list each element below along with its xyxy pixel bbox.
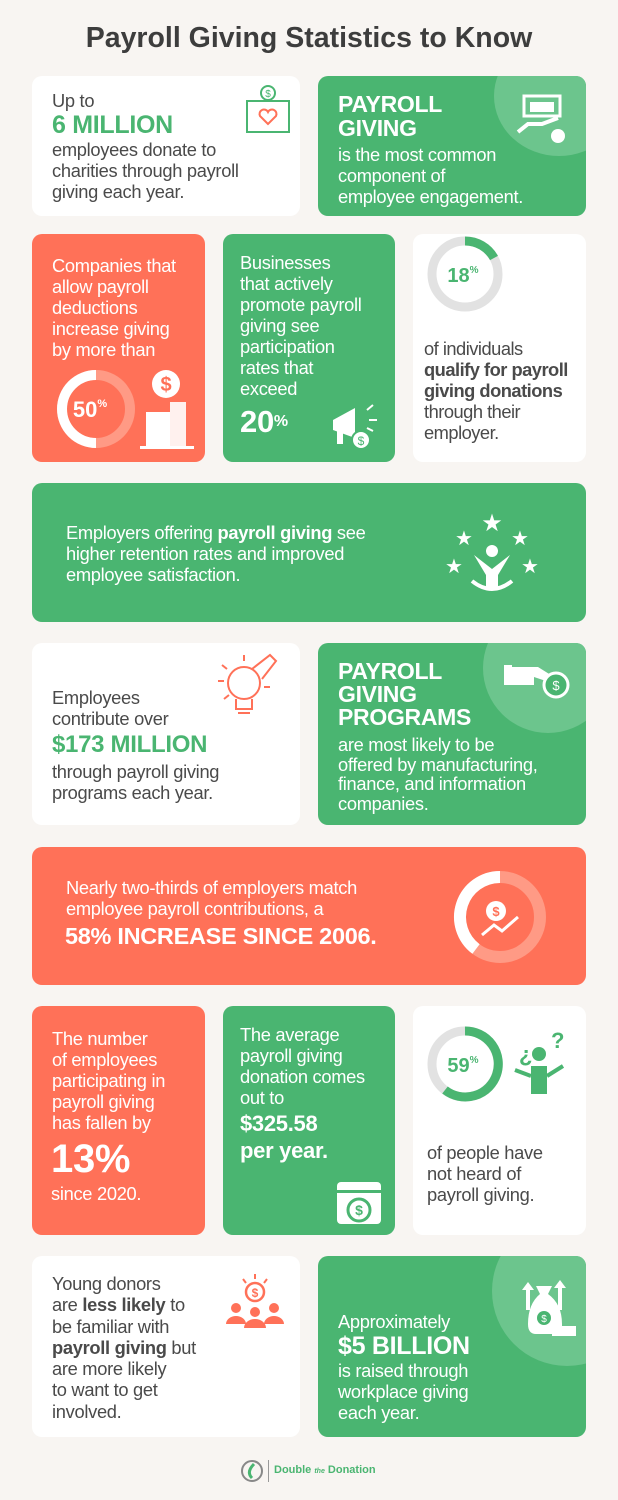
icon: money bag: $ <box>541 1314 547 1325</box>
text <box>338 144 523 207</box>
stat: 58% increase: 58% INCREASE SINCE 2006. <box>65 923 376 949</box>
panel: young donors <box>32 1256 300 1437</box>
text: each year. <box>338 1402 419 1423</box>
icon: donors group <box>226 1274 284 1328</box>
text: increase giving <box>52 318 169 339</box>
text: not heard of <box>427 1163 521 1184</box>
text: higher retention rates and improved <box>66 543 344 564</box>
text: donation comes <box>240 1066 365 1087</box>
text: $5 BILLION <box>338 1332 470 1360</box>
text: deductions <box>52 297 137 318</box>
icon: donors group: $ <box>252 1286 259 1300</box>
icon: calendar <box>337 1182 381 1224</box>
text: out to <box>240 1087 284 1108</box>
stat: 13%: 13% <box>51 1137 130 1181</box>
text: programs each year. <box>52 782 213 803</box>
icon: donation box <box>246 85 290 133</box>
text: qualify for payroll <box>424 359 568 380</box>
logo: Double the Donation: Double the Donation <box>274 1464 376 1476</box>
chart: 59% donut: % <box>470 1055 479 1066</box>
chart: 18% donut <box>428 236 502 312</box>
panel: 20% <box>223 234 395 462</box>
heading: payroll giving: PAYROLL <box>338 91 442 117</box>
text: through payroll giving <box>52 761 219 782</box>
icon: calendar: $ <box>355 1202 363 1218</box>
text <box>338 1311 470 1423</box>
icon: stars person: ★ <box>511 528 529 550</box>
text <box>427 1142 543 1205</box>
logo: Double the Donation <box>241 1460 376 1482</box>
icon: megaphone <box>333 404 377 448</box>
text: 6 million: 6 MILLION <box>52 111 173 139</box>
text: Employees <box>52 687 140 708</box>
text: Businesses <box>240 252 330 273</box>
panel: 6 million <box>32 76 300 216</box>
text <box>52 1028 165 1133</box>
text: of individuals <box>424 338 523 359</box>
text: $173 MILLION <box>52 731 207 758</box>
text <box>52 255 176 360</box>
banner: retention <box>32 483 586 622</box>
text: to want to get <box>52 1379 158 1400</box>
stat: 20%: 20% <box>240 404 288 439</box>
icon: confused person <box>514 1030 564 1094</box>
panel: 59% <box>413 1006 586 1235</box>
text: since 2020. <box>51 1183 141 1204</box>
text: giving donations <box>424 380 562 401</box>
text <box>424 338 568 443</box>
text: The number <box>52 1028 148 1049</box>
heading: payroll giving: GIVING <box>338 115 417 141</box>
panel: 18% <box>413 234 586 462</box>
text: payroll giving. <box>427 1184 534 1205</box>
text: Employers offering payroll giving see <box>66 522 365 543</box>
text: be familiar with <box>52 1316 169 1337</box>
text: that actively <box>240 273 333 294</box>
chart: donut with growth icon: $ <box>492 904 500 919</box>
icon: money bag <box>522 1280 576 1336</box>
stat: per year. <box>240 1138 328 1163</box>
title: Payroll Giving Statistics to Know <box>86 22 532 54</box>
stat: $325.58 <box>240 1111 317 1136</box>
panel: 50% <box>32 234 205 462</box>
text: workplace giving <box>338 1381 468 1402</box>
text: is raised through <box>338 1360 468 1381</box>
icon: stars person: ★ <box>481 510 503 537</box>
text: are less likely to <box>52 1294 185 1315</box>
chart: 18% donut: 18 <box>447 265 470 287</box>
icon: building: $ <box>160 374 172 396</box>
icon: hand coin <box>504 665 570 698</box>
chart: 50% donut <box>57 370 135 448</box>
chart: 18% donut: % <box>470 265 479 276</box>
text: of people have <box>427 1142 543 1163</box>
panel: programs <box>318 643 586 825</box>
text: are more likely <box>52 1358 166 1379</box>
text: 6 million: Up to <box>52 90 94 111</box>
text: 6 million: charities through payroll <box>52 160 239 181</box>
text: offered by manufacturing, <box>338 754 537 774</box>
icon: lightbulb <box>218 654 278 714</box>
text: employee payroll contributions, a <box>66 898 323 919</box>
text <box>66 877 357 919</box>
text: exceed <box>240 378 297 399</box>
text: The average <box>240 1024 339 1045</box>
icon: hand coin: $ <box>552 678 560 693</box>
text <box>338 734 537 814</box>
panel: 13% <box>32 1006 205 1235</box>
chart: 59% donut: 59 <box>447 1055 470 1077</box>
text: payroll giving <box>240 1045 342 1066</box>
text: employer. <box>424 422 499 443</box>
text: are most likely to be <box>338 734 494 755</box>
icon: stars person <box>445 510 539 591</box>
stat <box>240 1111 328 1163</box>
text: is the most common <box>338 144 496 165</box>
text: contribute over <box>52 708 168 729</box>
text: participating in <box>52 1070 165 1091</box>
panel: most common component <box>318 76 586 216</box>
icon: donation box: $ <box>265 89 271 100</box>
icon: money hand <box>516 94 565 143</box>
text: Approximately <box>338 1311 450 1332</box>
text: has fallen by <box>52 1112 151 1133</box>
icon: building <box>140 370 194 449</box>
panel: $5 billion <box>318 1256 586 1437</box>
text: payroll giving <box>52 1091 154 1112</box>
text: by more than <box>52 339 155 360</box>
icon: stars person: ★ <box>455 528 473 550</box>
text: 6 million <box>52 90 239 202</box>
text: companies. <box>338 792 428 814</box>
text: employee satisfaction. <box>66 564 240 585</box>
text: Nearly two-thirds of employers match <box>66 877 357 898</box>
text: rates that <box>240 357 313 378</box>
heading <box>338 658 471 730</box>
text: 6 million: employees donate to <box>52 139 216 160</box>
heading: payroll giving <box>338 91 442 141</box>
text: through their <box>424 401 520 422</box>
text: of employees <box>52 1049 157 1070</box>
text <box>52 1273 196 1422</box>
chart: 50% donut: % <box>97 398 107 410</box>
text: giving see <box>240 315 319 336</box>
heading: GIVING <box>338 681 417 707</box>
text: participation <box>240 336 335 357</box>
text <box>240 252 362 399</box>
text: finance, and information <box>338 773 526 794</box>
panel: $325.58 <box>223 1006 395 1235</box>
chart: donut with growth icon <box>454 871 546 963</box>
text: promote payroll <box>240 294 362 315</box>
panel: $173 million <box>32 643 300 825</box>
text: 6 million: giving each year. <box>52 181 184 202</box>
chart: 59% donut <box>428 1026 503 1102</box>
icon: stars person: ★ <box>445 556 463 578</box>
text: component of <box>338 165 445 186</box>
icon: stars person: ★ <box>521 556 539 578</box>
chart: 50% donut: 50 <box>73 397 97 422</box>
text <box>66 522 365 585</box>
text: Companies that <box>52 255 176 276</box>
text: payroll giving but <box>52 1337 196 1358</box>
text: Young donors <box>52 1273 161 1294</box>
text: allow payroll <box>52 276 149 297</box>
icon: megaphone: $ <box>358 434 365 448</box>
icon: confused person: ¿ <box>519 1042 532 1067</box>
banner: 58% increase <box>32 847 586 985</box>
text: employee engagement. <box>338 186 523 207</box>
text <box>240 1024 365 1108</box>
text: involved. <box>52 1401 121 1422</box>
heading: PROGRAMS <box>338 704 471 730</box>
text <box>52 687 219 803</box>
heading: PAYROLL <box>338 658 442 684</box>
